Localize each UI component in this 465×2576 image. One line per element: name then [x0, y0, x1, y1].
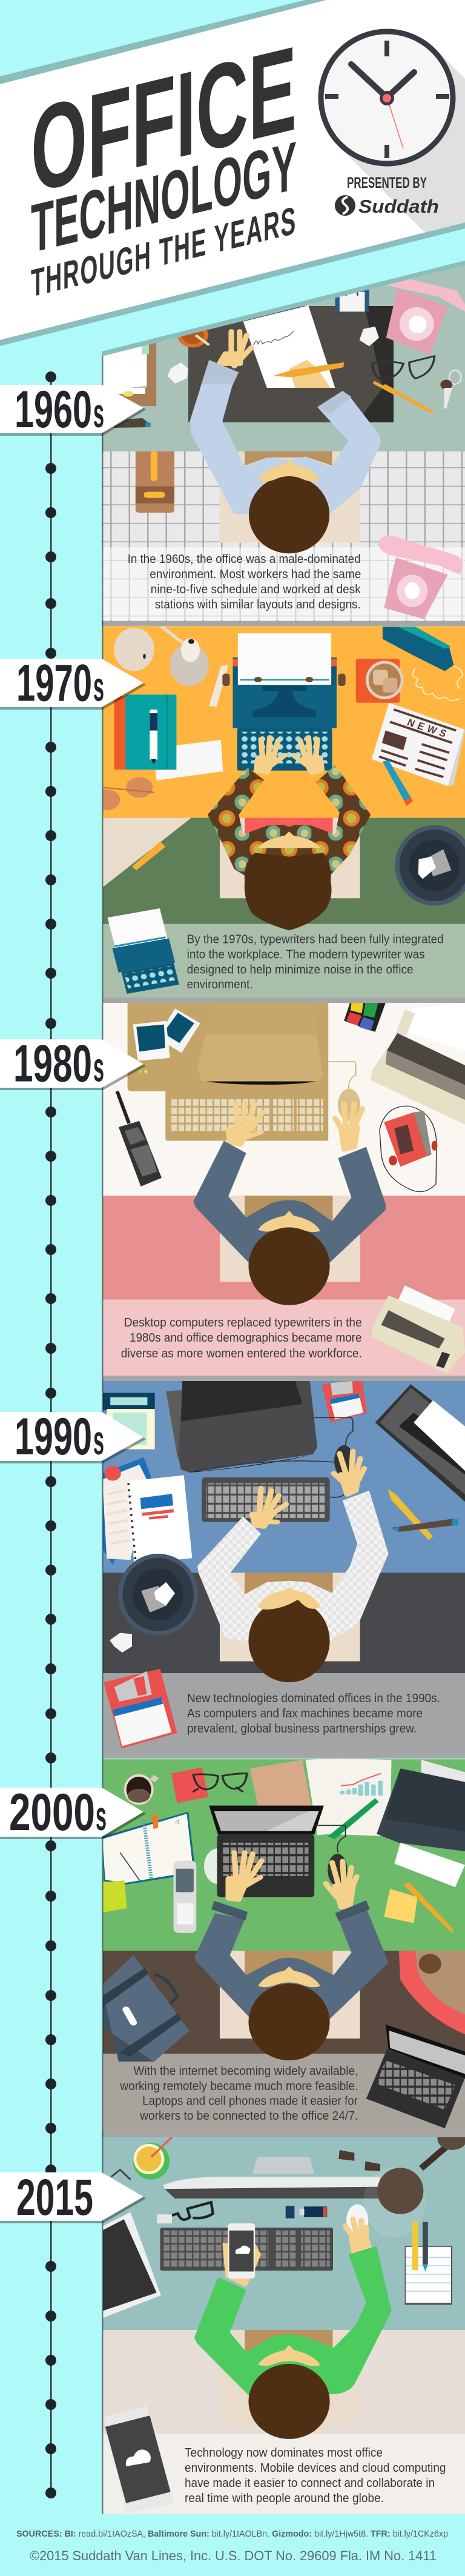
icon: pencil and pen [388, 1489, 458, 1540]
1980s description: Desktop computers replaced typewriters in the [124, 1316, 362, 1330]
icon: mouse [338, 1089, 360, 1121]
flag: 1990s: s [93, 1417, 104, 1463]
person: 1970s worker [208, 737, 371, 930]
flag: 1990s: 1990 [15, 1408, 92, 1466]
icon: briefcase [102, 1955, 189, 2062]
key [444, 388, 452, 409]
1960s description: nine-to-five schedule and worked at desk [151, 583, 361, 596]
2000s description: Laptops and cell phones made it easier for [142, 2094, 358, 2108]
2015 description [185, 2446, 446, 2505]
header banner [0, 0, 465, 356]
flag: 1980s: 1980 [13, 1035, 92, 1093]
icon: newspaper: NEWS [405, 717, 452, 741]
flag: 2000s: 2000 [9, 1783, 95, 1842]
icon: mouse [328, 1854, 348, 1886]
1960s description: environment. Most workers had the same [150, 568, 361, 581]
pencil [381, 384, 436, 414]
icon: red note [171, 1767, 208, 1803]
chair [220, 2330, 360, 2426]
icon: desk lamp [162, 627, 209, 686]
icon: folder and reports [250, 1759, 392, 1839]
flag: 1970s: 1970 [16, 654, 92, 713]
1990s description [187, 1692, 440, 1736]
icon: polaroid photos [133, 1008, 200, 1061]
2000s description: With the internet becoming widely available, [133, 2065, 358, 2078]
chair [220, 1196, 360, 1282]
icon: walkman and headphones [380, 1106, 437, 1192]
presented by: PRESENTED BY [347, 175, 427, 191]
icon: typewriter [209, 633, 346, 771]
icon: notepad with pen and pencil [405, 2222, 452, 2305]
icon: cable [111, 2170, 131, 2180]
icon: floppy disk small [322, 1381, 367, 1423]
person: 1960s worker [190, 384, 381, 553]
briefcase [136, 451, 174, 513]
1960s description: stations with similar layouts and designs. [155, 598, 361, 611]
icon: book and pen [114, 694, 176, 770]
2015 description: Technology now dominates most office [185, 2446, 383, 2460]
icon: envelope [156, 740, 223, 780]
icon: mouse [346, 2204, 368, 2237]
2000s description: workers to be connected to the office 24/7. [139, 2109, 358, 2123]
icon: binder clips [338, 2150, 380, 2171]
icon: small printer [372, 1285, 465, 1373]
flag: 1970s: s [93, 664, 104, 710]
1990s description: New technologies dominated offices in the 1990s. [187, 1692, 440, 1705]
icon: small typewriter [105, 908, 180, 994]
copyright: ©2015 Suddath Van Lines, Inc. U.S. DOT No. 29609 Fla. IM No. 1411 [30, 2548, 437, 2563]
1970s description: By the 1970s, typewriters had been fully integrated [187, 933, 444, 947]
1960s description [128, 553, 361, 611]
2000s description: working remotely became much more feasible. [119, 2080, 358, 2093]
1980s description [121, 1316, 362, 1360]
icon: desk clock [114, 628, 154, 671]
panel: 2000s office [102, 1759, 465, 2139]
icon: coffee cup [124, 1774, 159, 1805]
desk items 1960s [102, 275, 465, 393]
icon: mouse [334, 1445, 354, 1477]
icon: floppy disk large [104, 1669, 177, 1748]
person: 2000s worker [194, 1852, 389, 2060]
icon: sunglasses [103, 777, 154, 810]
icon: planner: 4 [175, 1818, 180, 1826]
icon: lunch plate [399, 1951, 465, 2034]
icon: pink telephone small [378, 535, 463, 619]
logo: Suddath: Suddath [358, 196, 439, 217]
icon: keyboard [202, 1477, 330, 1522]
icon: usb drive and SD card [286, 2206, 327, 2218]
right hand holding pencil [273, 360, 344, 388]
1970s description [187, 933, 444, 991]
panel: 1970s office [93, 626, 465, 1004]
1970s description: designed to help minimize noise in the office [187, 964, 414, 977]
chair [220, 1951, 360, 2039]
icon: blue pencil [383, 760, 413, 806]
icon: trash can [118, 1554, 198, 1636]
icon: trash can [395, 825, 465, 906]
icon: coffee on coaster [356, 659, 404, 703]
pen [114, 418, 148, 428]
panel: 2015 office [102, 2128, 465, 2515]
icon: flip phone [174, 1861, 196, 1933]
icon: drink with straw [133, 2137, 172, 2180]
chair [219, 451, 360, 543]
desk blotter [188, 306, 394, 422]
icon: fax machine [375, 1384, 465, 1502]
person: 1980s worker [193, 1103, 386, 1305]
2015 description: real time with people around the globe. [185, 2492, 384, 2505]
sources: SOURCES: BI: read.bi/1IAOzSA, Baltimore Sun: bit.ly/1IAOLBn. Gizmodo: bit.ly/1Hjw5t8. TFR: bit.ly/1CKz6xp [16, 2529, 448, 2539]
icon: clock [321, 32, 453, 164]
1980s description: diverse as more women entered the workforce. [121, 1347, 362, 1360]
icon: teal telephone [383, 627, 463, 701]
2015 description: have made it easier to connect and collaborate in [185, 2477, 435, 2490]
icon: glasses [193, 1774, 247, 1792]
2015 description: environments. Mobile devices and cloud computing [185, 2461, 446, 2475]
panel: 1980s office [102, 1003, 465, 1382]
1990s description: prevalent, global business partnerships grew. [187, 1722, 417, 1736]
icon: rubik cube [344, 1003, 386, 1032]
icon: planner [102, 1812, 196, 1885]
flag: 1980s: s [93, 1045, 104, 1091]
icon: large smartphone with cloud [104, 2406, 174, 2514]
icon: desktop monitor dark [166, 1381, 317, 1473]
icon: horn-rim glasses [372, 356, 435, 380]
icon: smart glasses [157, 2202, 213, 2223]
clock shadow [338, 49, 465, 243]
chair [220, 1573, 360, 1661]
1980s description: 1980s and office demographics became more [130, 1331, 362, 1345]
1960s description: In the 1960s, the office was a male-dominated [128, 553, 361, 566]
band: text background [102, 547, 465, 620]
flag: 2015: 2015 [16, 2169, 93, 2226]
icon: pink telephone [383, 275, 465, 355]
flag: 1960s: s [93, 390, 104, 436]
icon: calculator [102, 1393, 155, 1449]
icon: dot matrix printer [371, 1003, 465, 1125]
clipboard bottom [102, 388, 156, 406]
icon: printer [377, 1760, 465, 1887]
icon: laptop [209, 1806, 324, 1897]
icon: tablet [102, 2212, 161, 2318]
icon: crumpled paper [110, 1633, 132, 1652]
icon: CD [204, 1848, 232, 1884]
icon: all-in-one monitor [163, 2157, 380, 2198]
icon: keyboard [160, 2228, 333, 2271]
chair [220, 818, 360, 898]
icon: lamp [363, 2128, 465, 2237]
person: 1990s worker [197, 1451, 389, 1682]
icon: desktop computer and keyboard [128, 1003, 328, 1140]
1990s description: As computers and fax machines became more [187, 1707, 423, 1720]
icon: sticky note and pencil [384, 1882, 453, 1934]
2000s description [119, 2065, 358, 2123]
title [31, 20, 297, 305]
1970s description: into the workplace. The modern typewriter was [187, 948, 425, 961]
panel: 1960s office [102, 255, 465, 626]
person: 2015 worker [194, 2219, 392, 2439]
icon: mobile brick phone [117, 1091, 162, 1186]
panel: 1990s office [102, 1381, 465, 1759]
1970s description: environment. [187, 978, 253, 991]
icon: smartphone with cloud [228, 2223, 255, 2278]
left hand holding paper [200, 331, 251, 388]
icon: laptop tilted [366, 2025, 465, 2128]
flag: 1960s: 1960 [15, 381, 92, 439]
flag: 2000s: s [96, 1793, 107, 1839]
icon: newspaper [372, 703, 465, 786]
panel edge [102, 354, 103, 2514]
timeline [45, 371, 56, 2498]
icon: sticky note green [102, 1880, 127, 1912]
icon: clipboard and notebook [102, 1457, 192, 1565]
